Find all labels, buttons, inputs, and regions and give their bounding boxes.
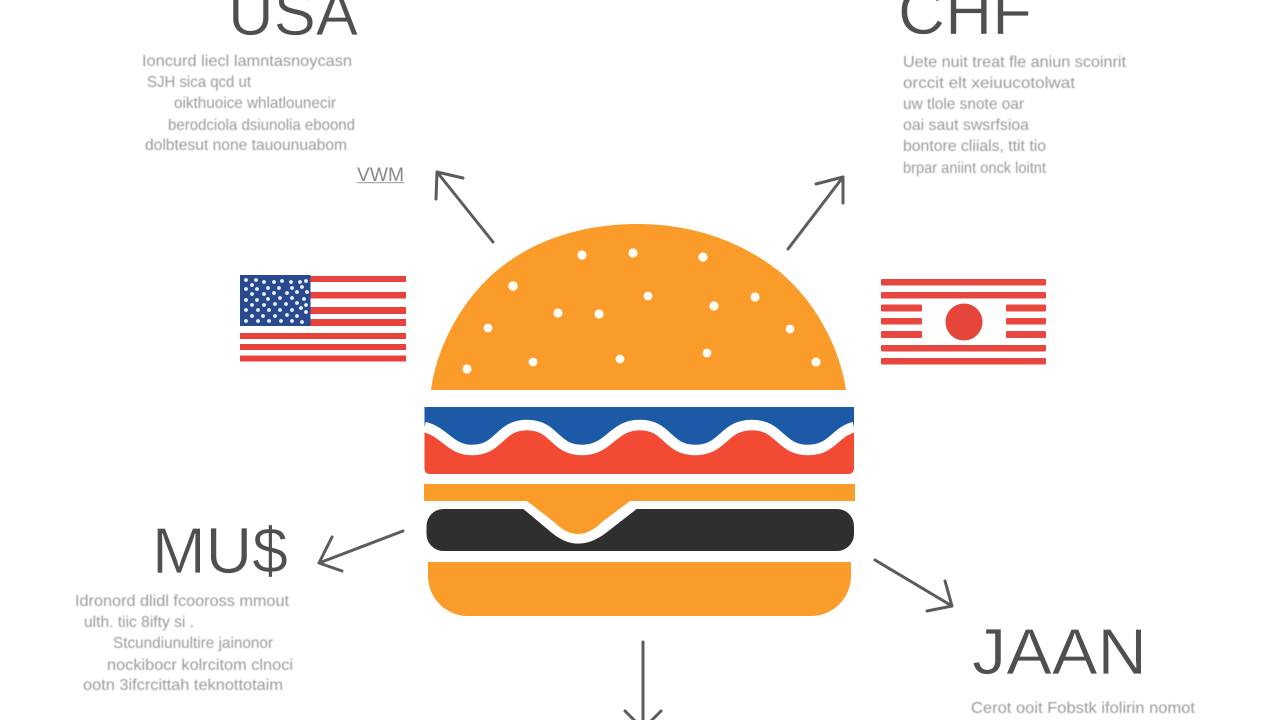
- arrow: down: [625, 642, 661, 720]
- text block: JAAN description: Cerot ooit Fobstk ifolirin nomot: [971, 700, 1196, 717]
- label: VWM: VWM: [357, 165, 404, 186]
- text block: MU$ description: nockibocr kolrcitom clnoci: [107, 657, 293, 674]
- text block: MU$ description: Idronord dlidl fcooross mmout: [75, 593, 290, 610]
- heading: JAAN: JAAN: [972, 615, 1147, 688]
- text block: CHF description: brpar aniint onck loitnt: [903, 160, 1047, 177]
- text block: MU$ description: [75, 593, 293, 694]
- heading: MU$: MU$: [152, 514, 288, 587]
- cheese: [424, 484, 855, 540]
- section: USA: [142, 0, 404, 186]
- section: MU$: [75, 514, 293, 694]
- arrow: to MU$: [319, 531, 403, 571]
- text block: USA description: Ioncurd liecl lamntasnoycasn: [142, 53, 352, 70]
- text block: MU$ description: ulth. tiic 8ifty si .: [84, 614, 194, 631]
- sesame seeds: [462, 248, 821, 374]
- text block: MU$ description: ootn 3ifcrcittah teknottotaim: [83, 677, 283, 694]
- flag disc: [946, 304, 982, 340]
- icon: burger: [424, 224, 855, 616]
- flag: USA: [240, 275, 406, 362]
- text block: USA description: oikthuoice whlatlounecir: [174, 95, 337, 112]
- arrow: to CHF: [788, 177, 843, 249]
- arrow: to JAAN: [875, 560, 952, 611]
- text block: MU$ description: Stcundiunultire jainonor: [113, 635, 274, 652]
- bottom bun: [428, 562, 851, 616]
- top bun: [431, 224, 846, 390]
- text block: CHF description: uw tlole snote oar: [903, 96, 1025, 113]
- text block: USA description: [142, 53, 355, 154]
- text block: CHF description: bontore cliials, ttit tio: [903, 138, 1046, 155]
- text block: USA description: dolbtesut none tauounuabom: [145, 137, 347, 154]
- text block: USA description: berodciola dsiunolia eboond: [168, 117, 355, 134]
- text block: CHF description: orccit elt xeiuucotolwat: [903, 75, 1076, 92]
- blue and red wave layer: [424, 407, 854, 474]
- section: CHF: [898, 0, 1127, 177]
- flag: Japan-style striped: [881, 279, 1046, 364]
- text block: CHF description: [903, 54, 1127, 177]
- text block: USA description: SJH sica qcd ut: [147, 74, 252, 91]
- text block: CHF description: oai saut swsrfsioa: [903, 117, 1029, 134]
- section: JAAN: [971, 615, 1196, 717]
- text block: CHF description: Uete nuit treat fle aniun scoinrit: [903, 54, 1127, 71]
- flag canton with stars: [240, 275, 310, 326]
- arrow: to USA: [436, 172, 493, 242]
- patty: [426, 509, 854, 551]
